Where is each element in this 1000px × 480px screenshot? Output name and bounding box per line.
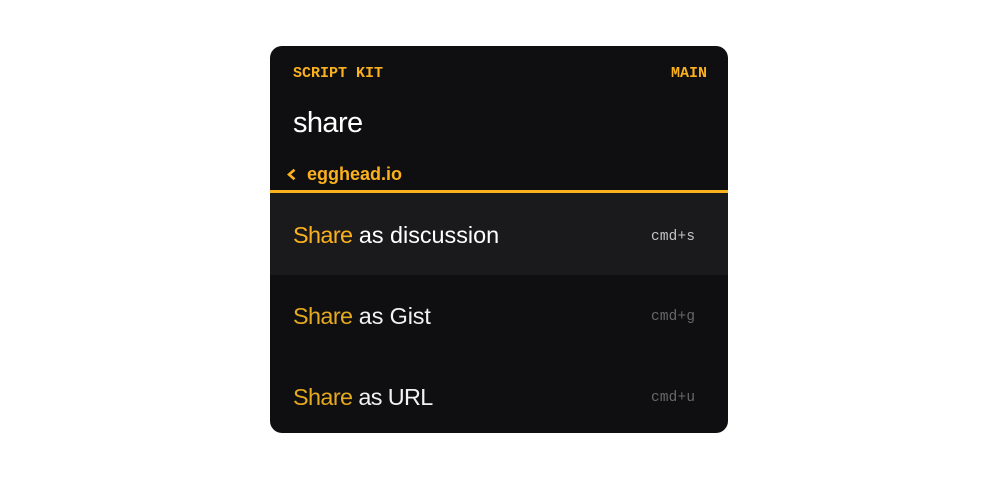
item label: Share as discussion — [293, 222, 499, 248]
search input text: share — [293, 107, 363, 139]
item label: Share as Gist — [293, 303, 431, 329]
label: MAIN: MAIN — [671, 65, 707, 82]
panel: Script Kit prompt — [270, 46, 728, 433]
list item: Share as discussion — [270, 193, 728, 275]
list item: Share as URL — [293, 384, 695, 410]
shortcut: cmd+s — [651, 229, 695, 245]
label: SCRIPT KIT: SCRIPT KIT — [293, 65, 383, 82]
item label: Share as URL — [293, 384, 433, 410]
icon: back chevron — [287, 168, 296, 180]
shortcut: cmd+g — [651, 309, 695, 325]
divider: accent line — [270, 190, 728, 193]
shortcut: cmd+u — [651, 390, 695, 406]
breadcrumb: egghead.io: egghead.io — [307, 164, 402, 184]
list item: Share as Gist — [293, 303, 695, 329]
